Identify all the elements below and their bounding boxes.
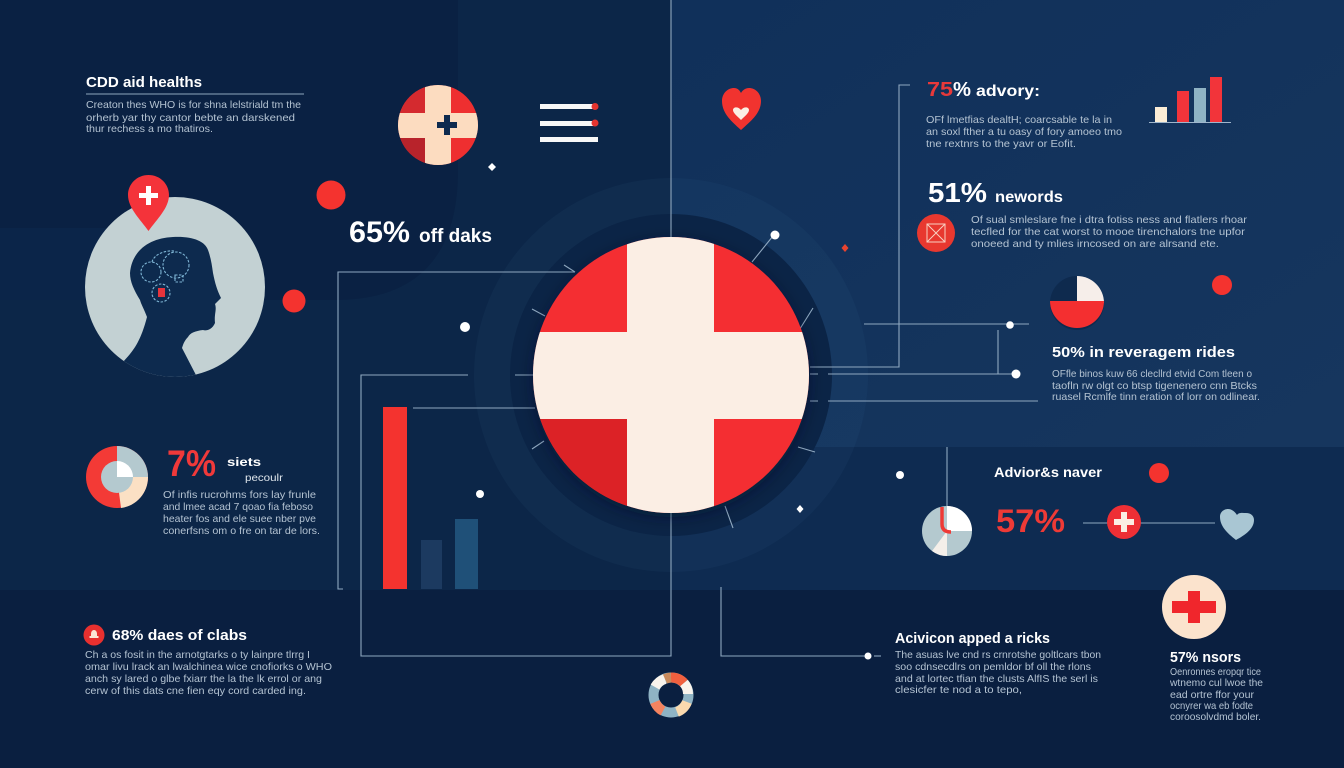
icon: plus circle: [1107, 505, 1141, 539]
text block: title top left: Creaton thes WHO is for shna lelstriald tm the: [86, 99, 301, 111]
heading: 65% off daks: 65%: [349, 216, 410, 249]
text block: activon apped a ricks: The asuas lve cnd rs crnrotshe goltlcars tbon: [895, 649, 1101, 661]
bar chart: left: [383, 407, 478, 589]
icon: location pin with cross: [128, 175, 169, 231]
text block: title top left: [86, 74, 304, 135]
decorative dots: [282, 163, 1232, 660]
stat: 51% newords: [917, 177, 1248, 252]
stat: 51% newords: 51%: [928, 177, 987, 208]
stat: 50% in reveragem rides: taofln rw olgt co btsp tigenenero cnn Btcks: [1052, 380, 1257, 392]
icon: cream circle with red cross: [1162, 575, 1226, 639]
icon: bell: [84, 624, 104, 646]
bar chart: top right: [1149, 77, 1231, 122]
panel: head and brain illustration: [85, 197, 265, 392]
stat: 50% in reveragem rides: 50% in reveragem rides: [1052, 345, 1235, 361]
stat: 75% advory: [926, 79, 1122, 150]
stat: advisors never 57%: 57%: [996, 503, 1065, 539]
stat: 75% advory: 75: [927, 79, 953, 101]
stat: 51% newords: newords: [995, 189, 1063, 206]
stat: 51% newords: onoeed and ty mlies irncosed on are alrsand ete.: [971, 238, 1219, 250]
stat: advisors never 57%: Advior&s naver: [994, 464, 1103, 480]
stat: 68% dades: [84, 624, 332, 697]
stat: 7%: [86, 443, 320, 537]
brain network icon: [141, 251, 189, 302]
stat: 51% newords: tecfled for the cat worst to mooe tirenchalors tne upfor: [971, 226, 1246, 238]
stat: 68% dades: anch sy lared o glbe fxiarr the la the lk errol or ang: [85, 673, 322, 685]
stat: 68% dades: cerw of this dats cne fien eqy cord carded ing.: [85, 685, 306, 697]
text block: activon apped a ricks: soo cdnsecdlrs on pemldor bf oll the rlons: [895, 661, 1091, 673]
text block: title top left: thur rechess a mo thatiros.: [86, 123, 213, 135]
stat: 75% advory: %: [953, 79, 971, 101]
stat: 50% in reveragem rides: OFfle binos kuw 66 clecllrd etvid Com tleen o: [1052, 368, 1252, 380]
text block: activon apped a ricks: and at lortec tfian the clusts AlfIS the serl is: [895, 673, 1098, 685]
stat: 7%: conerfsns om o fre on tar de lors.: [163, 525, 320, 537]
stat: 51% newords: Of sual smleslare fne i dtra fotiss ness and flatlers rhoar: [971, 214, 1248, 226]
text block: activon apped a ricks: Acivicon apped a ricks: [895, 631, 1050, 647]
stat: 7%: Of infis rucrohms fors lay frunle: [163, 489, 316, 501]
icon: heart top: [722, 88, 761, 130]
pie clock icon: [922, 506, 972, 556]
icon: heart: [1220, 509, 1254, 540]
stat: advisors never 57%: [922, 464, 1254, 556]
text block: 57% nsors: wtnemo cul lwoe the: [1169, 677, 1263, 689]
stat: 68% dades: Ch a os fosit in the arnotgtarks o ty lainpre tlrrg I: [85, 649, 310, 661]
stat: 7%: siets: [227, 457, 261, 469]
text block: 57% nsors: coroosolvdmd boler.: [1170, 711, 1261, 723]
text block: title top left: CDD aid healths: [86, 74, 202, 91]
stat: 50% in reveragem rides: ruasel Rcmlfe tinn eration of lorr on odlinear.: [1052, 391, 1260, 403]
stat: 7%: 7%: [167, 443, 216, 484]
donut chart: [86, 446, 148, 508]
stat: 75% advory: OFf lmetfias dealtH; coarcsable te la in: [926, 114, 1112, 126]
ring chart bottom centre: [654, 677, 688, 712]
text block: 57% nsors: ead ortre ffor your: [1170, 689, 1254, 701]
stat: 7%: heater fos and ele suee nber pve: [163, 513, 316, 525]
text block: title top left: orherb yar thy cantor bebte an darskened: [86, 112, 295, 124]
pie chart: 50%: [1050, 276, 1104, 330]
central rings: [474, 178, 868, 572]
heading: 65% off daks: [349, 216, 492, 249]
heading: 65% off daks: off daks: [419, 226, 492, 247]
stat: 68% dades: omar livu lrack an lwalchinea wice cnofiorks o WHO: [85, 661, 332, 673]
text block: 57% nsors: ocnyrer wa eb fodte: [1170, 700, 1253, 712]
stat: 75% advory: advory:: [976, 83, 1040, 100]
text block: activon apped a ricks: [895, 631, 1101, 696]
text block: 57% nsors: 57% nsors: [1170, 650, 1241, 666]
icon: menu lines: [540, 103, 598, 142]
connector lines: [338, 0, 1215, 656]
stat: 75% advory: an soxl fther a tu oasy of fory amoeo tmo: [926, 126, 1122, 138]
icon: cross medallion: [398, 85, 478, 165]
stat: 7%: pecoulr: [245, 473, 284, 484]
stat: 7%: and lmee acad 7 qoao fia feboso: [163, 501, 313, 513]
central red cross circle: [533, 237, 810, 513]
stat: 50% in reveragem rides: [1052, 345, 1260, 403]
stat: 75% advory: tne rextnrs to the yavr or Eofit.: [926, 138, 1076, 150]
icon: hourglass circle: [917, 214, 955, 252]
text block: 57% nsors: [1169, 650, 1263, 723]
text block: activon apped a ricks: clesicfer te nod a to tepo,: [895, 684, 1022, 696]
stat: 68% dades: 68% daes of clabs: [112, 628, 247, 644]
brain red spot: [158, 288, 165, 297]
text block: 57% nsors: Oenronnes eropqr tice: [1170, 666, 1261, 678]
